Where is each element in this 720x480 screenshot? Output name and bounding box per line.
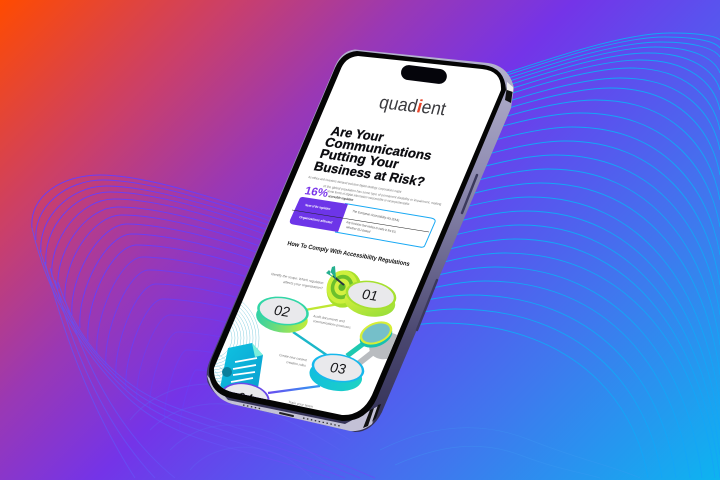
title: Putting Your [318, 146, 401, 171]
regulation table [290, 197, 435, 247]
connector 02 to 03 [292, 332, 328, 354]
title [314, 126, 432, 186]
step 2 text [313, 314, 351, 328]
disc 02 [256, 296, 309, 333]
step 2 text: Audit documents and [312, 314, 345, 324]
table values [346, 209, 400, 234]
number 01: 01 [361, 286, 379, 304]
charging port [280, 413, 293, 416]
table labels [299, 203, 333, 225]
intro paragraph: of the global population has some type of permanent disability or impairment, making [323, 184, 442, 206]
antenna bands [363, 404, 381, 428]
phone [206, 50, 514, 432]
magnifier handle [347, 344, 363, 356]
intro paragraph: accessible regulation [328, 194, 354, 202]
screen content [214, 98, 446, 408]
dart [333, 276, 344, 285]
volume and side buttons [417, 175, 477, 330]
icon: target [326, 266, 360, 308]
title: Business at Risk? [312, 158, 427, 189]
magnifier shadow [369, 333, 398, 360]
intro paragraph [308, 175, 442, 206]
step 3 text [279, 354, 307, 367]
step 3 text: creation rules [286, 360, 306, 368]
upper corner highlight [507, 82, 513, 92]
upper corner band [505, 86, 513, 103]
section heading: How To Comply With Accessibility Regulations [286, 240, 411, 268]
dynamic island [400, 64, 448, 85]
table labels: Name of the regulation [305, 203, 331, 211]
connector 01 to 02 [307, 304, 336, 311]
phone metal body [207, 50, 514, 432]
phone bottom edge with speaker and port [207, 375, 380, 431]
disc 03 [310, 354, 364, 392]
intro paragraph: some forms of digital information inaccessible or incomprehensible [327, 189, 410, 206]
title: Communications [323, 134, 434, 163]
step 1 text: affects your organization? [283, 280, 323, 290]
screen [214, 56, 501, 415]
speaker holes [243, 405, 340, 426]
table values: The European Accessibility Act (EAA) [352, 209, 400, 222]
step 4 text: Train your team [288, 400, 313, 409]
black bezel [209, 51, 506, 421]
table values: whether EU-based [346, 225, 371, 234]
step 1 text: Identify the scope: Which regulation [271, 272, 324, 285]
intro paragraph: As ethics and investors demand inclusive digital strategy, corporations ought [308, 175, 402, 194]
stat 16%: 16% [303, 185, 330, 200]
number 02: 02 [273, 302, 291, 320]
step 3 text: Create new content [279, 353, 308, 363]
icon: document [220, 343, 263, 388]
logo: quadient [377, 91, 449, 119]
number 03: 03 [329, 359, 347, 377]
right wave lines [240, 33, 720, 478]
step 2 text: communications processes [313, 319, 351, 330]
table labels: Organizations affected [299, 215, 333, 225]
disc 01 [344, 280, 396, 317]
decorative concentric arcs [214, 302, 260, 385]
left wave lines [32, 175, 375, 478]
disc 04 [223, 382, 270, 400]
dart fletching [326, 266, 336, 279]
connector 03 to 04 [268, 386, 320, 393]
number 04: 04 [236, 389, 254, 407]
magnifier lens [360, 330, 392, 348]
table purple header [290, 197, 348, 232]
table values: Any business that wishes to trade in the EU, [346, 220, 397, 234]
title: Are Your [329, 123, 386, 144]
lower faint wave lines [380, 428, 640, 478]
table divider [292, 210, 429, 232]
icon: magnifier [346, 321, 398, 365]
table outline [335, 204, 435, 247]
